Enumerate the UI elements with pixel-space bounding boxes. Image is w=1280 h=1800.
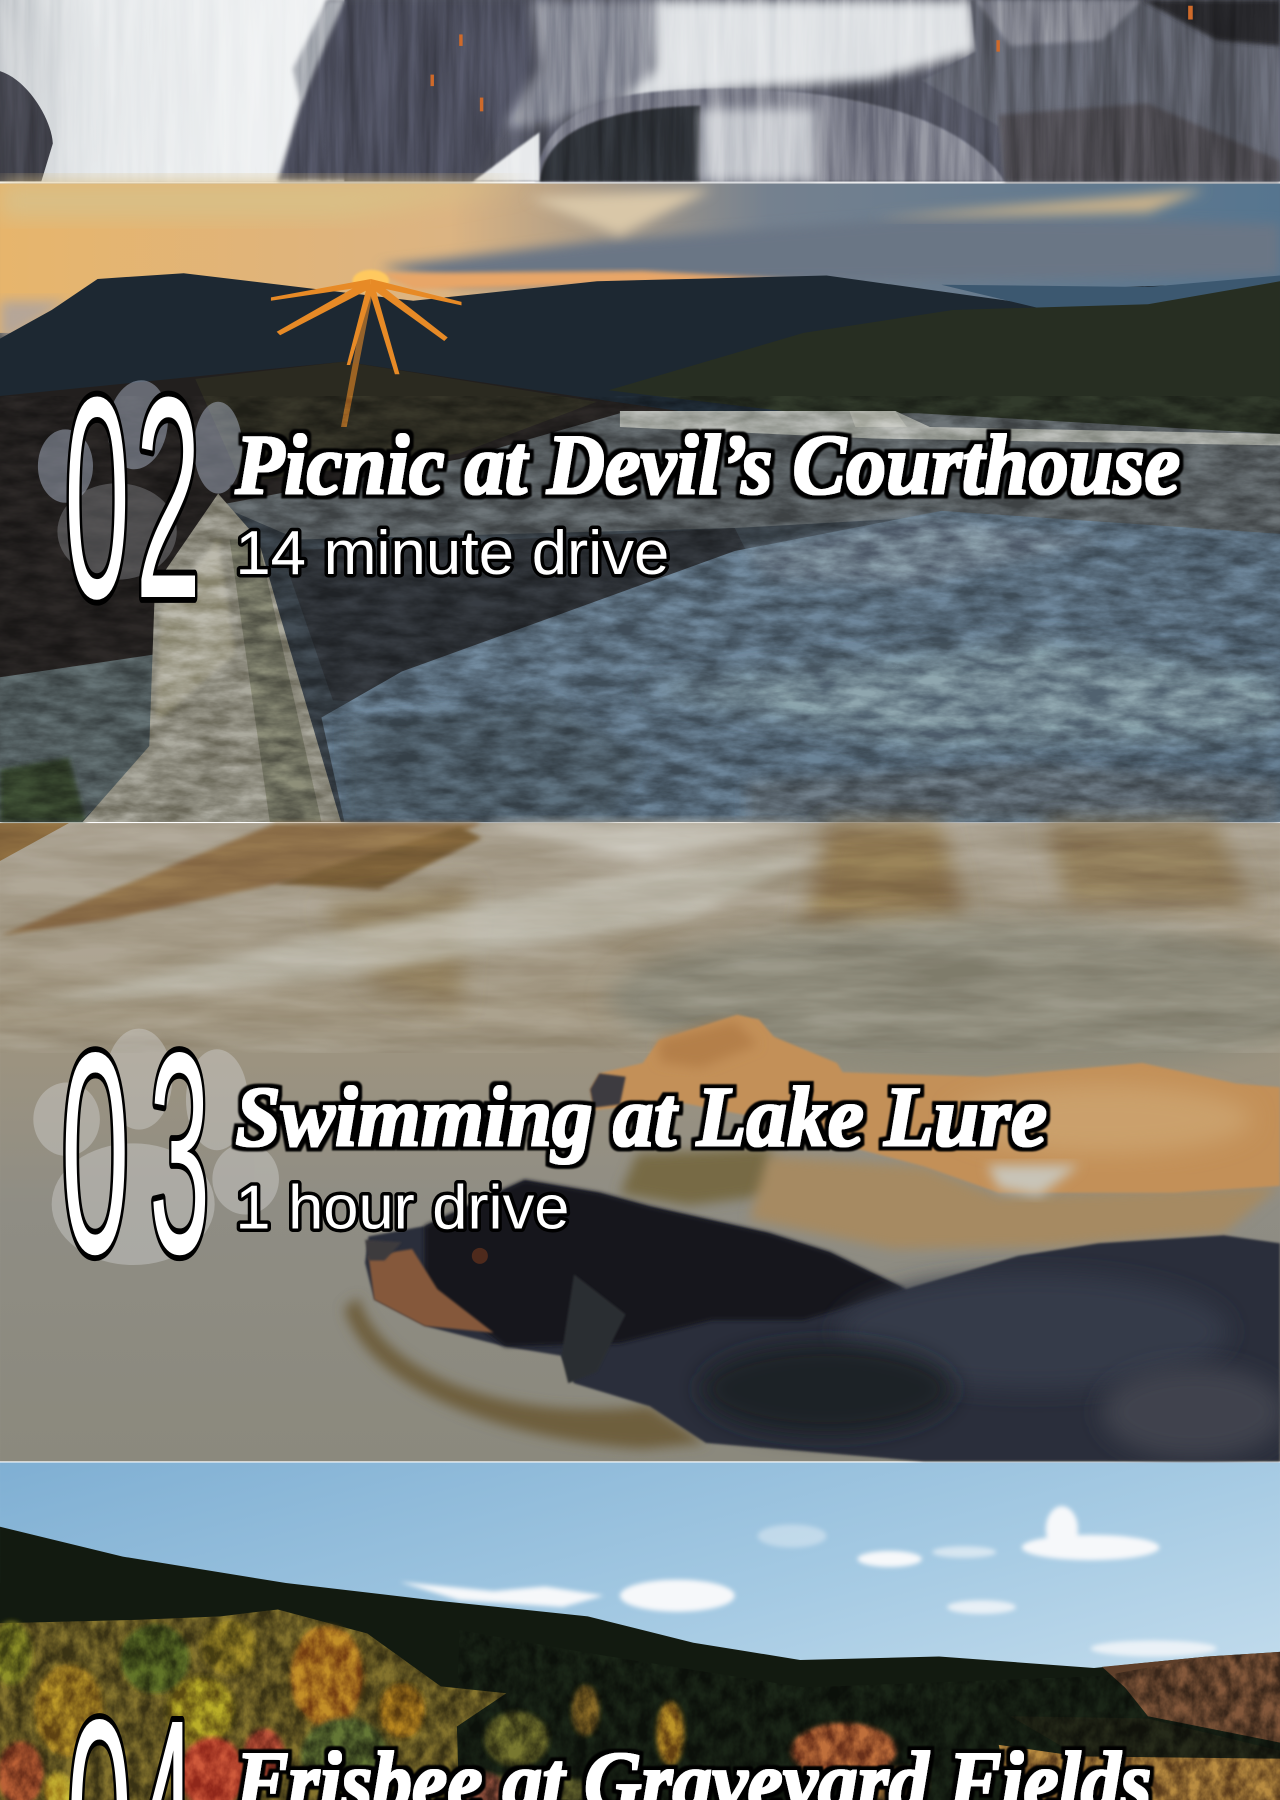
section 03 heading group <box>33 993 1047 1315</box>
tan dog <box>590 1015 1280 1196</box>
far autumn ridge <box>1102 1652 1280 1743</box>
autumn foliage centre <box>459 1685 928 1800</box>
panel: waterfall photo <box>0 0 1280 181</box>
autumn foliage left <box>0 1609 506 1800</box>
distant mountains <box>0 273 1280 413</box>
murky water right <box>608 918 1280 1079</box>
panel: Graveyard Fields photo <box>0 1462 1280 1800</box>
water texture <box>0 823 1280 1053</box>
number 02 <box>64 338 201 658</box>
icon: sun and rays <box>271 270 461 427</box>
dark forest <box>0 362 735 677</box>
light reflections <box>0 849 827 1010</box>
title: Swimming at Lake Lure: Swimming at Lake Lure <box>235 1069 1047 1165</box>
brown reflections <box>0 823 69 861</box>
rock and water texture <box>0 0 1280 181</box>
subtitle: 1 hour drive: 1 hour drive <box>235 1173 569 1242</box>
lower left cliff <box>0 654 161 822</box>
title: Picnic at Devil's Courthouse: Picnic at Devil’s Courthouse <box>234 417 1180 513</box>
number 03: 3 <box>149 993 210 1315</box>
number 03 <box>61 993 210 1315</box>
dark rock pool <box>281 528 746 706</box>
dark conifer ridge <box>0 1527 1280 1800</box>
olive water patches <box>620 1148 781 1205</box>
number 04 <box>67 1660 196 1800</box>
number 02: 0 <box>64 338 130 658</box>
number 02: 2 <box>135 338 201 658</box>
rock texture <box>0 396 1280 822</box>
foliage texture <box>0 1607 1280 1800</box>
section 02 heading group <box>38 338 1180 658</box>
section 04 heading group <box>67 1660 1151 1800</box>
clouds <box>400 1506 1217 1657</box>
icon: paw print 03 <box>33 1029 279 1265</box>
icon: paw print 02 <box>38 376 242 580</box>
number 03: 0 <box>61 993 129 1313</box>
panel: swimming dogs photo <box>0 823 1280 1461</box>
rock plateau <box>321 511 1280 822</box>
sky at sunset <box>0 184 1280 333</box>
panel: Devil's Courthouse photo <box>0 184 1280 822</box>
subtitle: 14 minute drive: 14 minute drive <box>235 519 669 588</box>
near stone wall <box>83 494 341 822</box>
far stone wall <box>218 413 1280 540</box>
black dog <box>365 1180 1280 1461</box>
